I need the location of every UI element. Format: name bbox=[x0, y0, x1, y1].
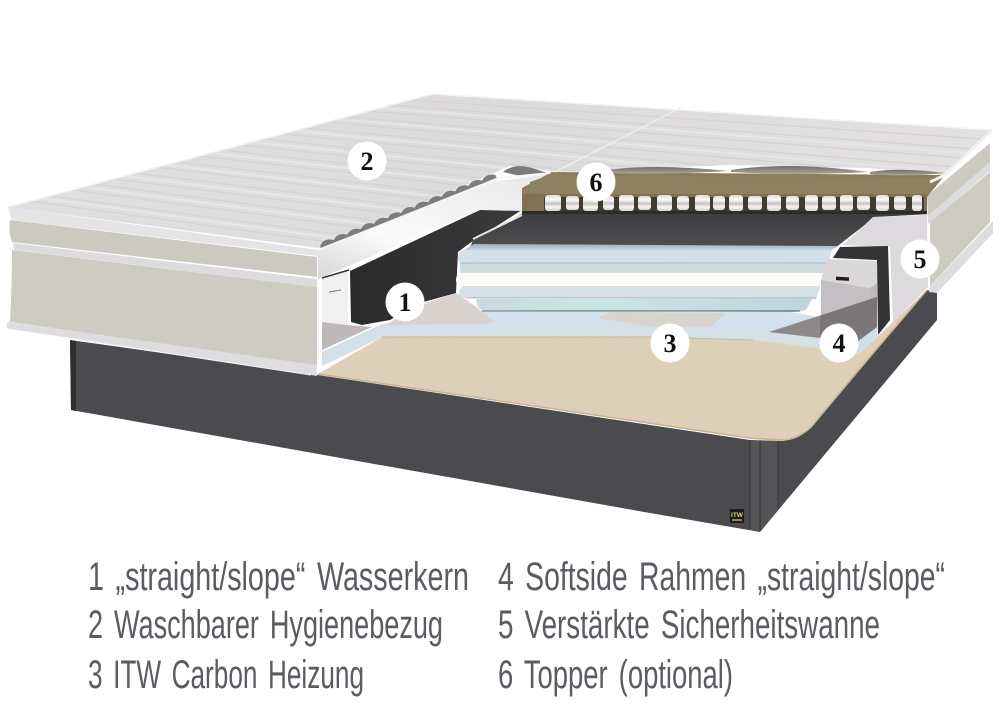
legend item 3: 3 ITW Carbon Heizung bbox=[88, 653, 364, 697]
legend item 2: 2 Waschbarer Hygienebezug bbox=[88, 603, 443, 647]
marker 5 bbox=[900, 240, 940, 278]
left compartment panel bbox=[322, 270, 349, 325]
marker 6 bbox=[576, 162, 616, 202]
dark inner wall, back bbox=[470, 212, 930, 248]
icon: ITW logo: ITW bbox=[731, 512, 744, 519]
base frame bbox=[70, 290, 937, 532]
component 1: water core layers bbox=[456, 244, 838, 312]
marker 2 bbox=[348, 142, 386, 180]
marker 2: 2 bbox=[360, 147, 374, 176]
component 2: washable hygiene cover, top surface bbox=[8, 94, 993, 256]
dark inner wall, left bbox=[350, 210, 522, 325]
marker 3: 3 bbox=[664, 329, 676, 358]
scalloped cover edge bbox=[318, 166, 550, 250]
marker 5: 5 bbox=[914, 245, 926, 274]
legend bbox=[88, 555, 945, 697]
pocket springs bbox=[545, 195, 922, 211]
legend item 1: 1 „straight/slope“ Wasserkern bbox=[88, 555, 469, 599]
marker 6: 6 bbox=[590, 168, 602, 197]
marker 4: 4 bbox=[832, 329, 846, 358]
marker 3 bbox=[650, 324, 690, 362]
component 5: reinforced safety tub bbox=[843, 215, 928, 322]
dark channel of the frame bbox=[833, 246, 890, 335]
marker 4 bbox=[820, 324, 858, 362]
mattress left top surface band white cut edge bbox=[318, 174, 552, 279]
mattress cover fabric, left side bbox=[6, 220, 317, 376]
legend item 6: 6 Topper (optional) bbox=[498, 653, 733, 697]
component 4: softside frame bbox=[769, 259, 877, 341]
marker 1 bbox=[386, 282, 424, 322]
component 6: topper bbox=[522, 172, 945, 214]
component: light blue safety liner floor bbox=[322, 293, 877, 366]
component 3: carbon heating sheet bbox=[597, 312, 725, 327]
icon: ITW logo bbox=[730, 509, 744, 523]
topper upper lenses bbox=[600, 166, 945, 175]
marker 1: 1 bbox=[398, 288, 412, 317]
beige mattress platform bbox=[318, 290, 927, 441]
mattress cover fabric, right side bbox=[927, 143, 993, 293]
